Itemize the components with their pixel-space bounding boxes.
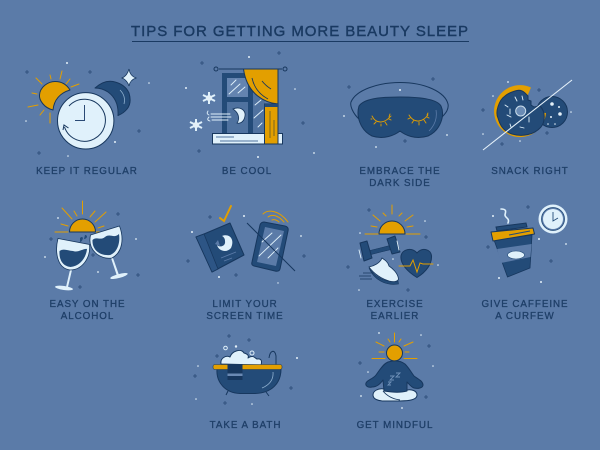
- icon: coffee cup and clock: [486, 204, 568, 283]
- icon: meditating figure: [358, 332, 434, 409]
- label line two: EARLIER: [371, 311, 419, 322]
- label: KEEP IT REGULAR: [36, 166, 138, 177]
- icon: wine glasses and sun: [44, 201, 140, 291]
- label line two: A CURFEW: [495, 311, 555, 322]
- panel: give caffeine a curfew: [481, 204, 569, 322]
- icon: sun, clock and moon: [25, 62, 150, 157]
- label: GIVE CAFFEINE: [481, 299, 569, 310]
- label: EXERCISE: [366, 299, 424, 310]
- icon: sleep mask: [301, 77, 448, 154]
- icon: donut and cookie crossed out: [481, 80, 572, 150]
- panel: exercise earlier: [300, 205, 439, 322]
- icon: window with curtain: [185, 51, 296, 158]
- label: GET MINDFUL: [357, 420, 433, 431]
- label line two: SCREEN TIME: [206, 311, 284, 322]
- panel: be cool: [185, 51, 296, 177]
- panel: get mindful: [357, 332, 434, 431]
- icon: book and crossed-out phone: [186, 206, 295, 284]
- label: BE COOL: [222, 166, 272, 177]
- label: LIMIT YOUR: [212, 299, 278, 310]
- label: EMBRACE THE: [359, 166, 441, 177]
- icon: bathtub with foam: [193, 334, 298, 405]
- icon: sun, dumbbell, shoe and heart: [300, 205, 439, 292]
- panel: embrace the dark side: [301, 77, 448, 189]
- label line two: ALCOHOL: [61, 311, 114, 322]
- label: TAKE A BATH: [210, 420, 281, 431]
- label: EASY ON THE: [49, 299, 126, 310]
- panel: keep it regular: [25, 62, 150, 177]
- title: TIPS FOR GETTING MORE BEAUTY SLEEP: [131, 23, 469, 40]
- panel: easy on the alcohol: [44, 201, 140, 322]
- panel: snack right: [481, 80, 572, 177]
- label: SNACK RIGHT: [491, 166, 569, 177]
- panel: limit your screen time: [186, 206, 295, 322]
- panel: take a bath: [193, 334, 298, 431]
- label line two: DARK SIDE: [369, 178, 431, 189]
